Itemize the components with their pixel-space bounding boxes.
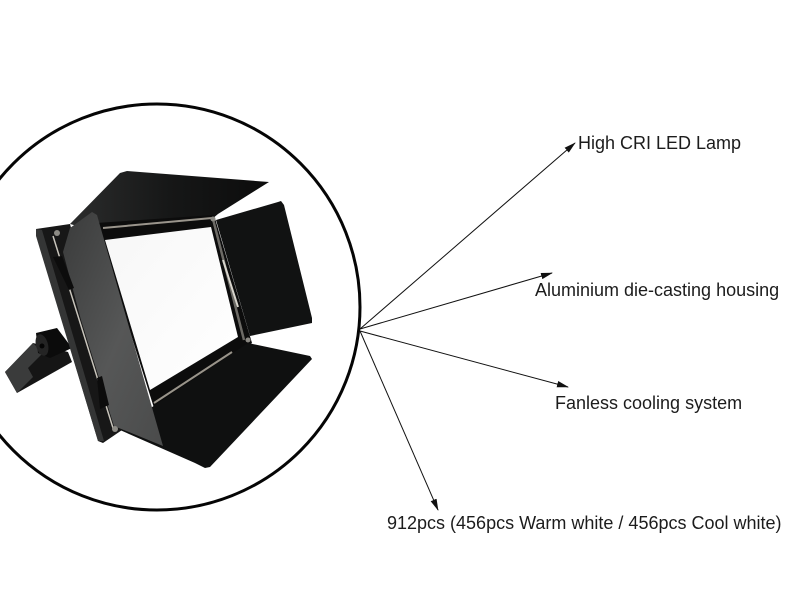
arrow: Fanless cooling: [360, 331, 568, 387]
left silver rail: [53, 236, 113, 428]
mounting knob: [33, 328, 72, 358]
right barn door: [216, 201, 312, 336]
top barn door: [70, 171, 269, 232]
product photo: LED panel light: [5, 171, 312, 468]
bottom barn door: [120, 343, 312, 468]
arrow: LED count: [360, 331, 438, 510]
inner frame: [96, 215, 252, 408]
hinges: [53, 256, 109, 409]
label: Fanless cooling system: Fanless cooling system: [555, 393, 742, 413]
rear frame: [36, 224, 125, 443]
label: Aluminium die-casting housing: Aluminium die-casting housing: [535, 280, 779, 300]
white LED panel: [105, 227, 238, 390]
arrow: High CRI LED Lamp: [360, 143, 575, 329]
label: High CRI LED Lamp: High CRI LED Lamp: [578, 133, 741, 153]
label: LED count: 912pcs (456pcs Warm white / 456pcs Cool white): [387, 513, 782, 533]
right silver rail: [213, 219, 244, 340]
arrow: Aluminium housing: [360, 273, 552, 329]
left barn door: [63, 212, 163, 446]
circle frame: [0, 104, 360, 510]
mounting bracket: [5, 343, 72, 393]
top silver rail: [103, 218, 212, 228]
corner screws: [54, 216, 250, 432]
bottom silver rail: [154, 352, 232, 403]
